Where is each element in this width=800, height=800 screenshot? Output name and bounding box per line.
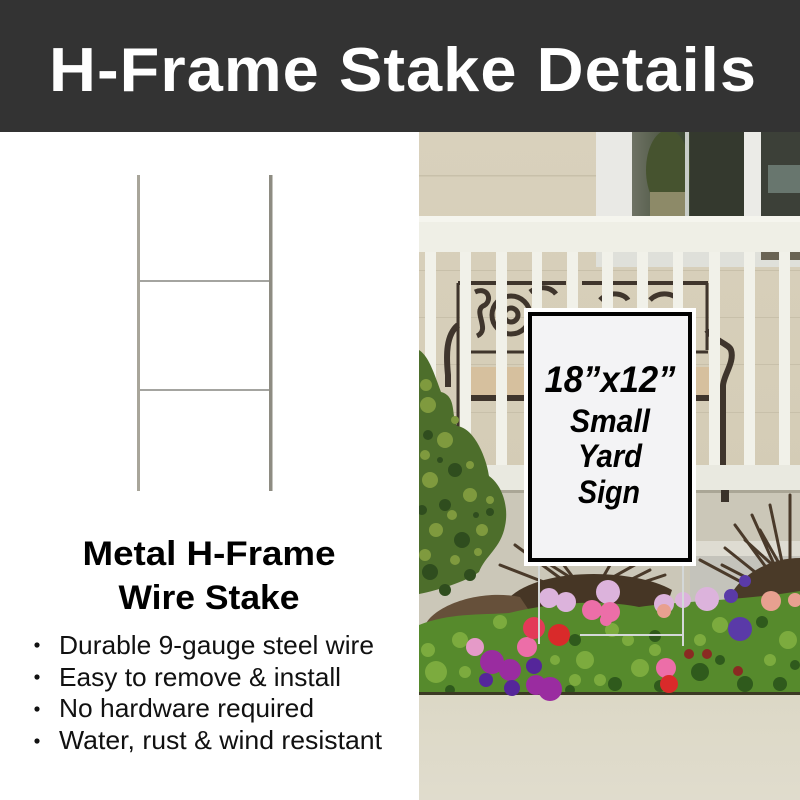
shrub [417, 350, 506, 596]
feature bullet list: Water, rust & wind resistant [59, 725, 383, 755]
yard sign [524, 308, 696, 566]
feature bullet list: Durable 9-gauge steel wire [59, 630, 374, 660]
house wall siding [419, 132, 800, 492]
petunias [466, 575, 800, 701]
sign text: Small [570, 403, 651, 439]
porch railing [419, 216, 800, 490]
porch floor and steps [419, 490, 800, 625]
bench [444, 281, 735, 465]
feature bullet list: Easy to remove & install [59, 662, 341, 692]
window [596, 130, 800, 267]
stake name heading: Wire Stake [118, 579, 300, 617]
sign text: 18”x12” [544, 359, 676, 400]
stake name heading: Metal H-Frame [82, 535, 336, 573]
header banner [0, 0, 800, 132]
feature bullet list: No hardware required [59, 693, 314, 723]
photo: yard sign in front of porch [417, 130, 800, 800]
flower bed foliage [419, 591, 800, 696]
sign text: Yard [578, 438, 643, 474]
sidewalk [419, 695, 800, 800]
feature bullet list [34, 630, 383, 755]
stake wires under sign [538, 566, 684, 646]
product image: H-frame wire stake [137, 175, 272, 491]
sign text [544, 359, 676, 510]
stake name heading [82, 535, 336, 617]
ornamental grasses [426, 494, 800, 622]
title: H-Frame Stake Details [49, 36, 757, 105]
sign text: Sign [578, 474, 640, 510]
